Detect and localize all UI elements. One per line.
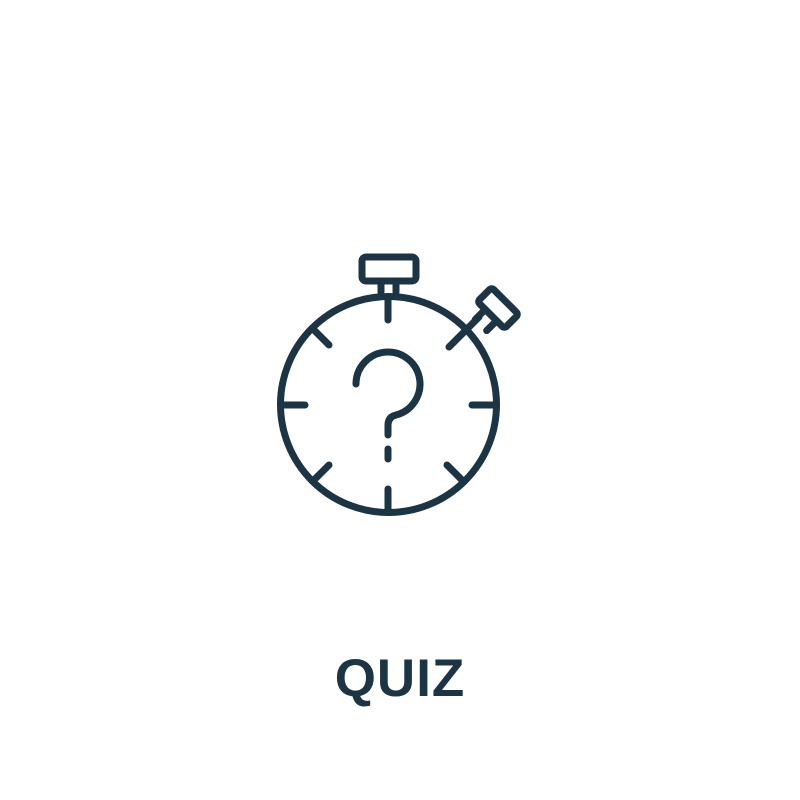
icon: dial (280, 296, 496, 512)
icon: side button (468, 287, 519, 338)
icon: top button (362, 257, 416, 292)
icon: question mark (356, 352, 420, 459)
title: QUIZ (335, 649, 465, 708)
